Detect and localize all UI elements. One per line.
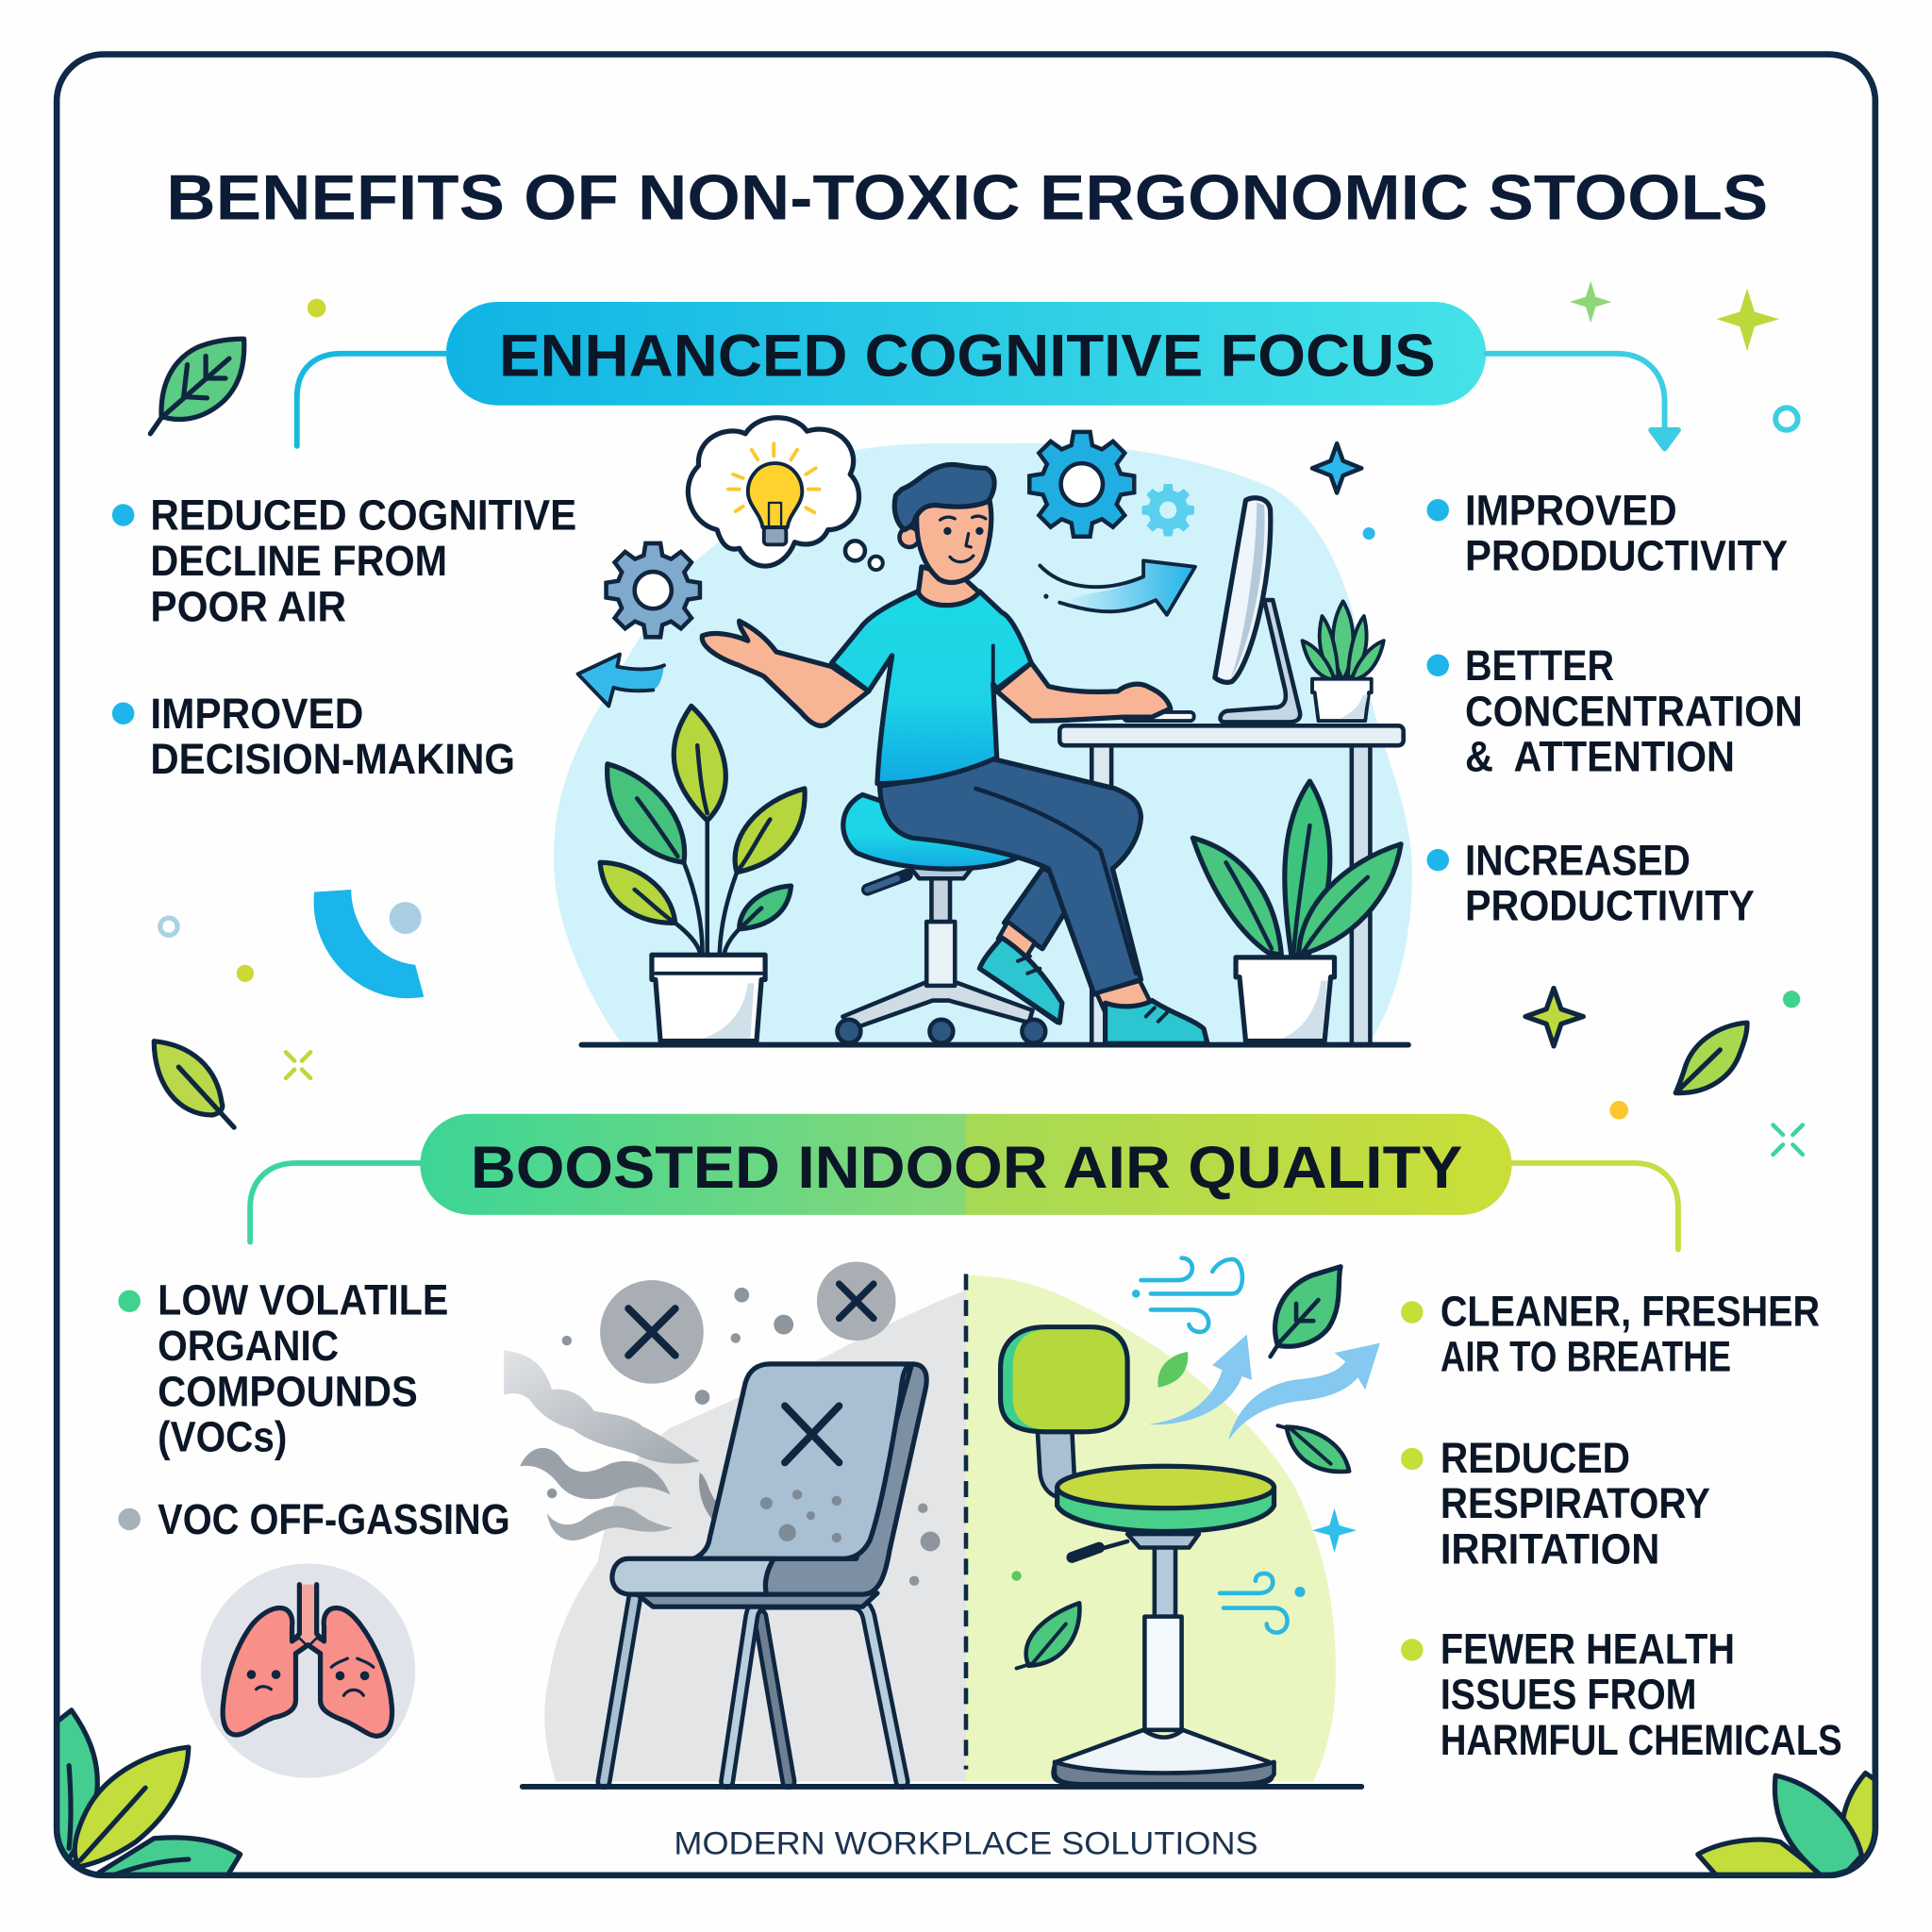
bullet: low VOCs <box>118 1276 448 1461</box>
illustration: person working at desk on stool <box>554 418 1412 1045</box>
bullet: fewer health issues: HARMFUL CHEMICALS <box>1441 1716 1842 1764</box>
section heading: boosted indoor air quality: BOOSTED INDOOR AIR QUALITY <box>471 1135 1462 1201</box>
list: focus right <box>1426 486 1803 930</box>
leaf small <box>1158 1352 1188 1388</box>
shirt <box>832 591 1031 784</box>
rear leg and shoe <box>1004 869 1084 949</box>
bullet: cleaner air: AIR TO BREATHE <box>1441 1333 1731 1381</box>
legs <box>604 1598 902 1782</box>
stool <box>838 794 1045 1043</box>
right plant <box>1192 781 1401 1041</box>
backrest side panel and seat right <box>765 1364 926 1594</box>
icon: leaf top left <box>150 339 244 434</box>
dot <box>1363 527 1375 540</box>
icon: lime sparkle outlined <box>1525 989 1583 1046</box>
post <box>1038 1429 1074 1497</box>
lever <box>1096 1541 1127 1550</box>
bullet: improved decision-making: IMPROVED <box>150 690 363 738</box>
leaf lower <box>1017 1603 1079 1668</box>
icon: cross sparkle lime <box>286 1052 310 1078</box>
bullet: improved decision-making: DECISION-MAKING <box>150 735 515 783</box>
left arm and hand <box>702 621 869 725</box>
face <box>917 487 991 583</box>
dot <box>308 299 325 317</box>
background blob <box>554 443 1412 1045</box>
bullet: reduced cognitive decline <box>112 491 576 630</box>
green dot <box>1011 1571 1022 1581</box>
bullet: reduced irritation: REDUCED <box>1441 1434 1630 1482</box>
seat <box>1058 1487 1274 1532</box>
section heading: boosted indoor air quality <box>420 1114 1512 1215</box>
bullet: better concentration <box>1426 641 1803 781</box>
right arm <box>997 663 1171 721</box>
wind icon top <box>1134 1258 1242 1332</box>
ground line <box>581 1042 1408 1047</box>
icon: cyan arc <box>314 890 424 998</box>
dot <box>1783 991 1800 1008</box>
particles <box>547 1288 941 1586</box>
dot <box>1609 1101 1628 1120</box>
clean stool <box>1001 1327 1274 1784</box>
backrest <box>1001 1327 1127 1432</box>
person <box>702 464 1208 1043</box>
X mark <box>785 1406 839 1462</box>
neck <box>918 567 979 608</box>
bullet: reduced irritation: IRRITATION <box>1441 1524 1659 1573</box>
decorative icons: upper section <box>150 281 1803 1155</box>
air arrows <box>1148 1335 1380 1441</box>
bullet: low VOCs: LOW VOLATILE <box>158 1276 448 1324</box>
icon: sad lungs <box>201 1563 415 1778</box>
ring <box>1775 408 1798 430</box>
bullet: cleaner air: CLEANER, FRESHER <box>1441 1287 1820 1335</box>
bullet: fewer health issues: ISSUES FROM <box>1441 1671 1697 1719</box>
bullet: reduced cognitive decline: DECLINE FROM <box>150 537 447 585</box>
desk plant <box>1303 601 1384 721</box>
icon: sparkle large lime <box>1716 289 1779 351</box>
bullet: cleaner air <box>1401 1287 1820 1381</box>
connector: air right <box>1512 1163 1678 1249</box>
leaf right <box>1277 1425 1349 1472</box>
connector arrow: focus right <box>1486 354 1678 448</box>
ground line <box>523 1785 1361 1789</box>
bullet: reduced cognitive decline: REDUCED COGNITIVE <box>150 491 576 540</box>
leaf upper <box>1271 1267 1341 1357</box>
icon: cross sparkle teal <box>1774 1124 1803 1155</box>
bullet: better concentration: CONCENTRATION <box>1465 687 1803 735</box>
title: BENEFITS OF NON-TOXIC ERGONOMIC STOOLS <box>166 162 1768 233</box>
illustration: toxic chair versus clean stool <box>504 1258 1380 1787</box>
bullet: better concentration: BETTER <box>1465 641 1614 690</box>
desk <box>1059 725 1404 1045</box>
dashed divider <box>964 1274 968 1770</box>
bullet: reduced cognitive decline: POOR AIR <box>150 582 346 630</box>
toxic chair <box>604 1364 926 1782</box>
hair <box>894 464 994 530</box>
arrow: swoosh to monitor <box>1040 560 1195 615</box>
icon: cyan sparkle <box>1312 1508 1357 1553</box>
bullet: better concentration: & ATTENTION <box>1465 733 1735 781</box>
footer text: MODERN WORKPLACE SOLUTIONS <box>674 1826 1258 1862</box>
ear <box>899 527 919 547</box>
near leg trousers <box>880 759 1141 994</box>
fumes <box>504 1351 748 1541</box>
list: air left <box>118 1276 510 1543</box>
icon: lime leaf left <box>154 1041 234 1127</box>
seat <box>612 1558 774 1594</box>
icon: blue sparkle <box>1312 443 1361 492</box>
bullet: reduced irritation: RESPIRATORY <box>1441 1479 1710 1527</box>
dot <box>390 902 422 934</box>
keyboard <box>1124 712 1194 721</box>
ring <box>160 918 177 935</box>
front shoe <box>1096 981 1152 1013</box>
left plant <box>600 706 805 1041</box>
icon: gear left <box>607 543 700 637</box>
bullet: low VOCs: ORGANIC <box>158 1322 339 1370</box>
bullet: fewer health issues <box>1401 1624 1842 1764</box>
bullet: low VOCs: (VOCs) <box>158 1413 287 1461</box>
wind icon lower <box>1220 1574 1303 1633</box>
icon: leaves around stool <box>1017 1267 1349 1668</box>
backrest front panel <box>693 1364 909 1558</box>
arrow: swoosh left <box>578 655 664 706</box>
lime background blob <box>966 1275 1336 1782</box>
dot <box>237 965 254 982</box>
gray background blob <box>544 1291 966 1782</box>
base <box>1053 1730 1273 1783</box>
corner leaves bottom left <box>57 1707 243 1875</box>
thought bubble with light bulb <box>688 418 883 570</box>
icon: gear small <box>1141 484 1194 536</box>
icon: sparkle small green <box>1570 281 1611 323</box>
section heading: enhanced cognitive focus <box>446 302 1486 406</box>
bullet: improved decision-making <box>112 690 515 783</box>
stains <box>760 1490 841 1542</box>
bullet: low VOCs: COMPOUNDS <box>158 1367 418 1415</box>
list: focus left <box>112 491 576 783</box>
bullet: increased productivity: PRODUCTIVITY <box>1465 882 1755 930</box>
list: air right <box>1401 1287 1842 1764</box>
bullet: improved productivity: IMPROVED <box>1465 486 1677 534</box>
bullet: reduced irritation <box>1401 1434 1710 1573</box>
icon: gear large <box>1029 432 1134 537</box>
bullet: improved productivity <box>1426 486 1788 580</box>
toxic symbols <box>600 1261 896 1384</box>
bullet: improved productivity: PRODDUCTIVITY <box>1465 532 1788 580</box>
bullet: increased productivity <box>1426 836 1755 930</box>
monitor <box>1215 498 1300 722</box>
bullet: VOC off-gassing: VOC OFF-GASSING <box>158 1495 510 1543</box>
column <box>1155 1542 1175 1617</box>
connector: air left <box>250 1163 420 1242</box>
section heading: enhanced cognitive focus: ENHANCED COGNITIVE FOCUS <box>499 323 1436 389</box>
bullet: increased productivity: INCREASED <box>1465 836 1690 884</box>
icon: lime leaf right <box>1675 1023 1747 1093</box>
seat base <box>1127 1534 1199 1547</box>
bullet: fewer health issues: FEWER HEALTH <box>1441 1624 1735 1673</box>
connector arrow: focus left <box>297 354 446 446</box>
